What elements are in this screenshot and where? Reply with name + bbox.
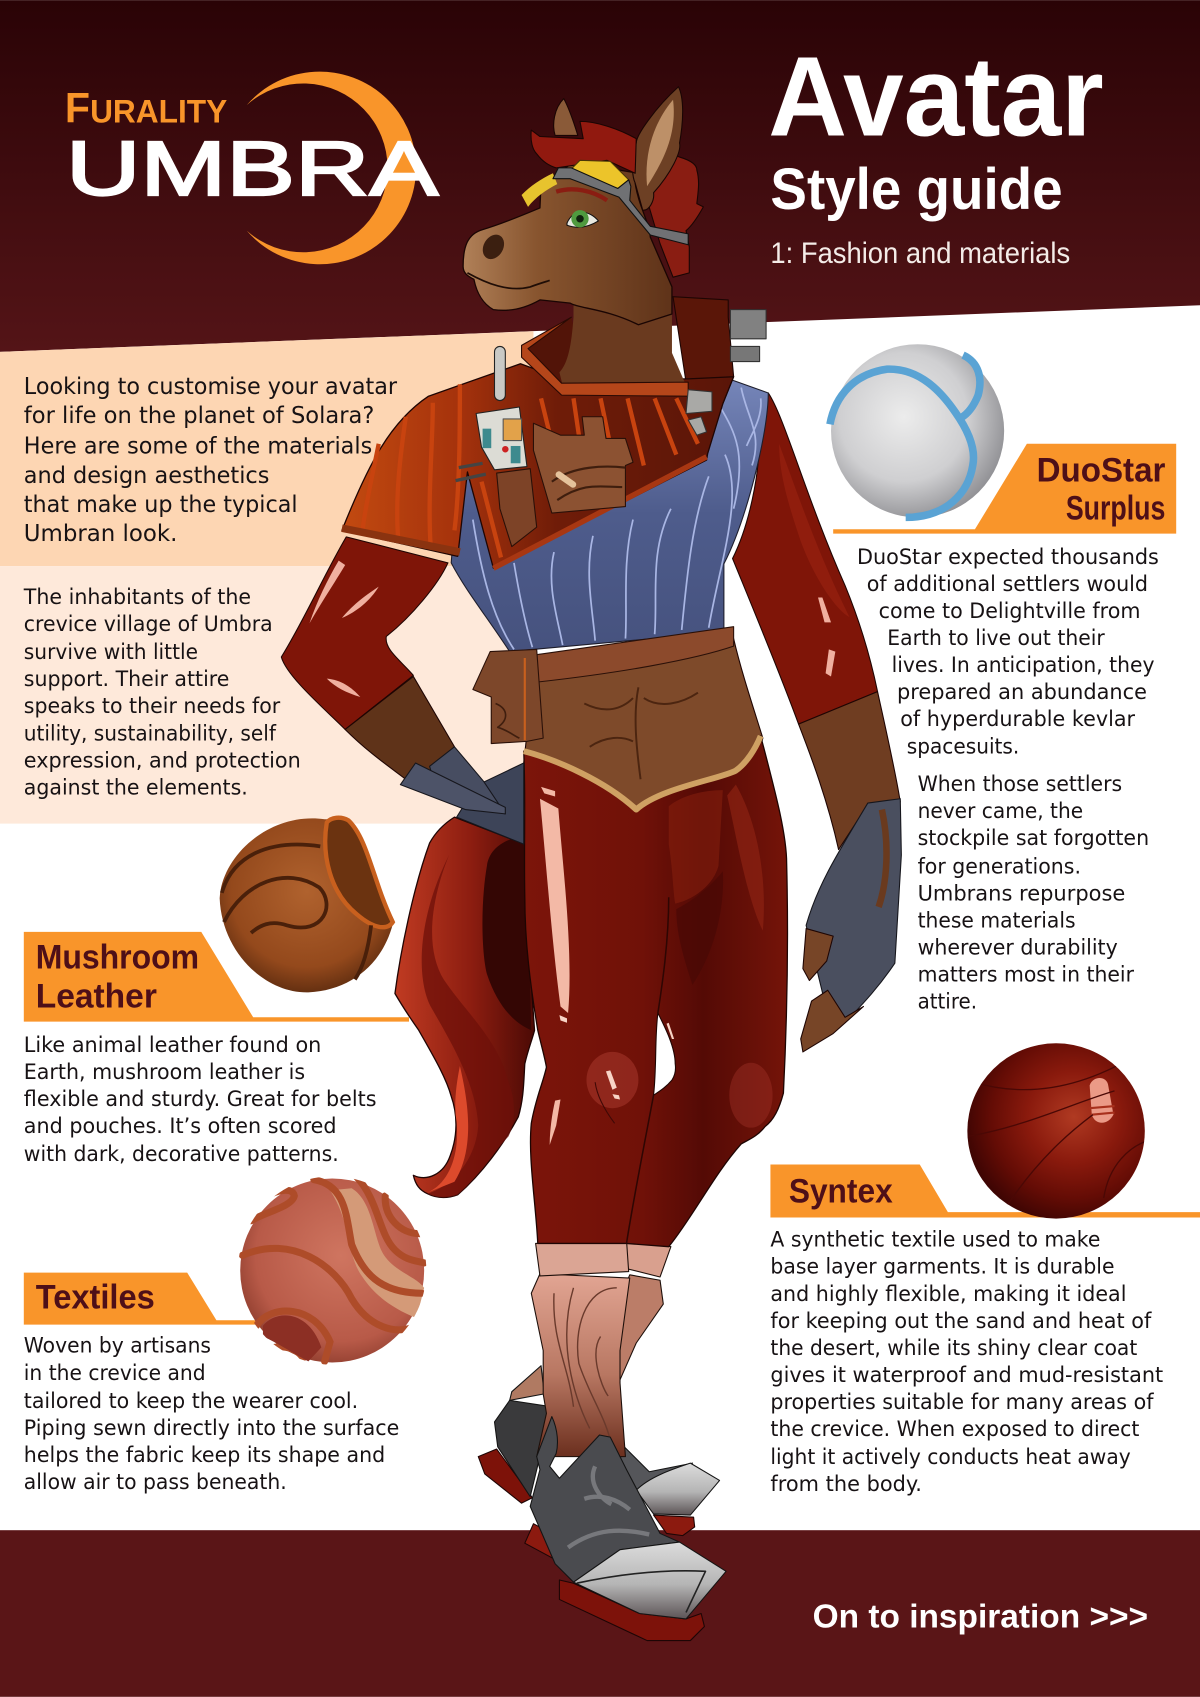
front sock cuff bbox=[536, 1240, 629, 1276]
Syntex text: gives it waterproof and mud-resistant bbox=[770, 1363, 1163, 1387]
blue ribbed top bbox=[451, 377, 768, 652]
metal brackets bbox=[730, 310, 766, 362]
description text: crevice village of Umbra bbox=[24, 612, 273, 636]
neck bbox=[559, 260, 686, 385]
description text: expression, and protection bbox=[24, 748, 301, 772]
back sock cuff bbox=[625, 1238, 671, 1277]
DuoStar text: attire. bbox=[918, 990, 977, 1014]
abdominal shading bbox=[584, 687, 698, 779]
small pouch bbox=[497, 469, 537, 547]
Syntex text: and highly flexible, making it ideal bbox=[770, 1282, 1126, 1306]
DuoStar text: matters most in their bbox=[918, 963, 1134, 987]
DuoStar text: of hyperdurable kevlar bbox=[900, 707, 1135, 731]
Syntex text: A synthetic textile used to make bbox=[770, 1228, 1100, 1252]
DuoStar text: prepared an abundance bbox=[897, 680, 1147, 704]
DuoStar text: come to Delightville from bbox=[879, 599, 1140, 623]
label: Syntex bbox=[770, 1164, 1200, 1217]
sphere: mushroom leather bbox=[220, 818, 394, 992]
intro text bbox=[24, 374, 398, 547]
DuoStar text bbox=[857, 545, 1159, 1014]
left forearm bbox=[345, 676, 454, 788]
label: Syntex: Syntex bbox=[789, 1172, 893, 1210]
Syntex text: the crevice. When exposed to direct bbox=[770, 1417, 1139, 1441]
Syntex text: the desert, while its shiny clear coat bbox=[770, 1336, 1137, 1360]
description text: utility, sustainability, self bbox=[24, 721, 277, 745]
DuoStar text: lives. In anticipation, they bbox=[892, 653, 1155, 677]
belt bbox=[536, 627, 734, 682]
call to action: On to inspiration >>> bbox=[813, 1599, 1148, 1636]
waistband bbox=[524, 736, 761, 810]
description text bbox=[23, 585, 301, 799]
description panel bbox=[0, 566, 533, 824]
belly bbox=[524, 639, 763, 823]
title: Avatar: Avatar bbox=[768, 33, 1104, 160]
Mushroom Leather text: Earth, mushroom leather is bbox=[24, 1060, 305, 1084]
intro panel bbox=[0, 331, 533, 566]
Mushroom Leather text: with dark, decorative patterns. bbox=[24, 1142, 339, 1166]
DuoStar text: wherever durability bbox=[918, 936, 1118, 960]
DuoStar text: Umbrans repurpose bbox=[918, 881, 1125, 905]
description text: survive with little bbox=[24, 640, 198, 664]
pin bbox=[456, 463, 486, 481]
collar bbox=[522, 317, 688, 396]
Mushroom Leather text: and pouches. It’s often scored bbox=[24, 1114, 337, 1138]
DuoStar text: spacesuits. bbox=[907, 734, 1019, 758]
right sleeve bbox=[733, 393, 878, 724]
label: DuoStar Surplus: DuoStar bbox=[1037, 452, 1165, 490]
belt pouch bbox=[473, 649, 543, 744]
eye bbox=[567, 210, 598, 227]
Syntex text: base layer garments. It is durable bbox=[770, 1255, 1115, 1279]
collar interior bbox=[522, 317, 584, 383]
Syntex text bbox=[770, 1228, 1163, 1496]
small ear bbox=[554, 99, 578, 135]
metal plates bbox=[686, 390, 712, 435]
label: Textiles: Textiles bbox=[36, 1278, 155, 1316]
intro text: and design aesthetics bbox=[24, 463, 269, 489]
holster pouch bbox=[533, 417, 633, 513]
description text: support. Their attire bbox=[24, 667, 229, 691]
logo: Furality Umbra: UMBRA bbox=[66, 126, 439, 212]
Mushroom Leather text: flexible and sturdy. Great for belts bbox=[24, 1087, 377, 1111]
front leg sock bbox=[531, 1274, 630, 1457]
label: Mushroom Leather: Mushroom bbox=[36, 939, 199, 977]
intro text: for life on the planet of Solara? bbox=[24, 403, 374, 429]
label: Mushroom Leather bbox=[24, 932, 409, 1022]
DuoStar text: these materials bbox=[918, 908, 1076, 932]
sphere: Syntex bbox=[967, 1043, 1145, 1219]
description text: speaks to their needs for bbox=[24, 694, 281, 718]
intro text: Umbran look. bbox=[24, 521, 177, 547]
back leg sock bbox=[606, 1275, 663, 1380]
Syntex text: for keeping out the sand and heat of bbox=[770, 1309, 1152, 1333]
footer band bbox=[0, 1530, 1200, 1697]
description text: The inhabitants of the bbox=[23, 585, 251, 609]
sphere: textiles bbox=[240, 1177, 424, 1362]
Textiles text: tailored to keep the wearer cool. bbox=[24, 1389, 358, 1413]
right ear bbox=[632, 87, 683, 210]
goggles bbox=[522, 160, 688, 245]
description text: against the elements. bbox=[24, 775, 248, 799]
pants bbox=[524, 736, 788, 1247]
Textiles text: allow air to pass beneath. bbox=[24, 1470, 287, 1494]
intro text: Looking to customise your avatar bbox=[24, 374, 398, 400]
Syntex text: from the body. bbox=[770, 1472, 922, 1496]
head bbox=[463, 162, 672, 325]
DuoStar text: never came, the bbox=[918, 799, 1083, 823]
header band bbox=[0, 0, 1200, 352]
logo: Furality Umbra: FURALITY bbox=[65, 84, 228, 131]
neck collar back bbox=[673, 297, 734, 404]
Textiles text: in the crevice and bbox=[24, 1361, 206, 1385]
Textiles text: Piping sewn directly into the surface bbox=[24, 1416, 399, 1440]
radio device bbox=[476, 346, 527, 470]
back shoe bbox=[478, 1366, 720, 1536]
intro text: that make up the typical bbox=[24, 492, 298, 518]
right forearm bbox=[799, 692, 900, 850]
intro text: Here are some of the materials bbox=[24, 434, 372, 460]
left glove bbox=[400, 747, 524, 844]
Syntex text: properties suitable for many areas of bbox=[770, 1390, 1154, 1414]
back hair bbox=[648, 155, 703, 277]
DuoStar text: of additional settlers would bbox=[867, 572, 1148, 596]
subtitle: Fashion and materials: 1: Fashion and materials bbox=[770, 238, 1070, 270]
subtitle: Style guide: Style guide bbox=[770, 157, 1063, 222]
Textiles text: Woven by artisans bbox=[24, 1334, 211, 1358]
Mushroom Leather text bbox=[24, 1033, 377, 1166]
logo: Furality Umbra bbox=[65, 72, 439, 264]
Syntex text: light it actively conducts heat away bbox=[770, 1445, 1131, 1469]
label: DuoStar Surplus: Surplus bbox=[1066, 490, 1165, 528]
character illustration bbox=[281, 87, 901, 1641]
front shoe bbox=[525, 1417, 726, 1641]
DuoStar text: for generations. bbox=[918, 854, 1081, 878]
label: Mushroom Leather: Leather bbox=[36, 978, 157, 1016]
tail bbox=[395, 817, 535, 1197]
DuoStar text: DuoStar expected thousands bbox=[857, 545, 1159, 569]
DuoStar text: Earth to live out their bbox=[887, 626, 1105, 650]
DuoStar text: stockpile sat forgotten bbox=[918, 826, 1149, 850]
Textiles text: helps the fabric keep its shape and bbox=[24, 1443, 385, 1467]
hair bbox=[531, 121, 636, 173]
label: Textiles bbox=[24, 1273, 260, 1325]
right glove and hand bbox=[801, 799, 901, 1052]
DuoStar text: When those settlers bbox=[918, 772, 1122, 796]
left sleeve bbox=[281, 537, 448, 729]
label: DuoStar Surplus bbox=[833, 444, 1176, 534]
Mushroom Leather text: Like animal leather found on bbox=[24, 1033, 321, 1057]
sphere: DuoStar surplus bbox=[830, 344, 1004, 517]
Textiles text bbox=[24, 1334, 399, 1494]
jacket bbox=[342, 364, 734, 568]
